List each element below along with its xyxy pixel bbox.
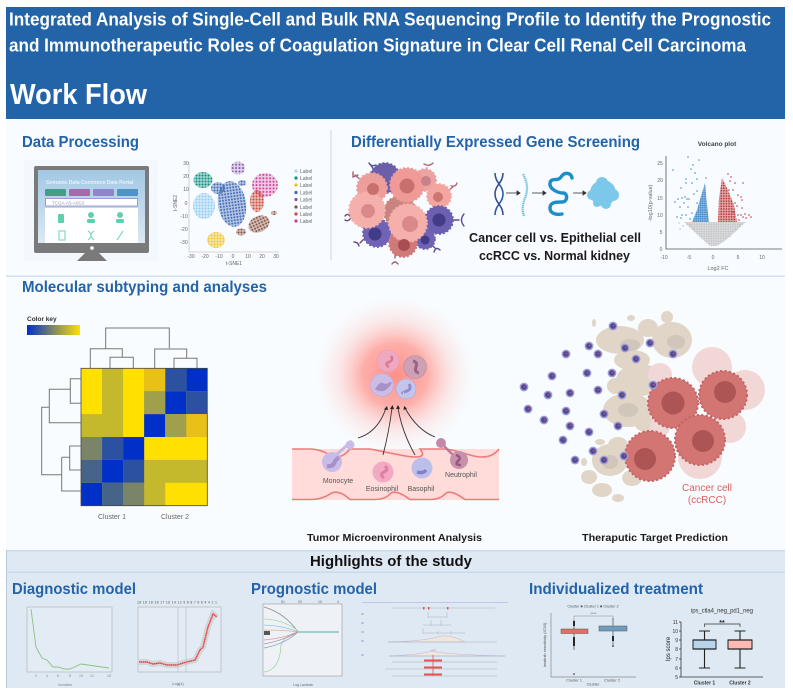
chart: IPS score boxplot: 8 [675,647,678,653]
chart: drug sensitivity boxplot: Cluster [587,682,600,686]
heading: prognostic model: Prognostic model [251,581,377,598]
cancer cell label: (ccRCC) [688,495,726,506]
chart: t-SNE scatter: 20 [259,254,265,260]
chart: LASSO coefficient paths: 51 [281,600,285,604]
cluster labels [98,514,189,521]
heading: molecular subtyping: Molecular subtyping and analyses [22,279,267,296]
legend: cluster labels [294,169,312,225]
chart: misclassification curve [137,600,221,686]
heading: highlights: Highlights of the study [310,553,473,570]
migrated immune cells [370,350,426,399]
chart: volcano plot: 25 [657,161,663,167]
chart: drug sensitivity boxplot: Cluster 1 [566,678,583,682]
heatmap cells [81,368,207,506]
chart: error vs variables: 10 [79,674,83,678]
chart: volcano plot: 10 [759,255,765,261]
chart: IPS score boxplot: Cluster 2 [729,680,751,686]
legend: cluster labels: Label [300,219,312,225]
text: comparison labels: Cancer cell vs. Epithelial cell [469,231,641,245]
cancer cell label [682,483,732,506]
chart: IPS score boxplot: 11 [673,620,678,626]
panel: differentially expressed gene screening [345,134,782,272]
title: Integrated Analysis of Single-Cell and Bulk RNA Sequencing Profile to Identify the Prognostic [9,10,771,30]
panel: data processing [22,134,312,267]
chart: clustered heatmap [27,316,207,521]
caption: tumor microenvironment: Tumor Microenvironment Analysis [307,532,482,544]
chart: drug sensitivity boxplot: Cluster ■ Cluster 1 ■ Cluster 2 [567,604,619,608]
header banner [6,7,785,119]
chart: IPS score boxplot: 10 [672,629,678,635]
heading: individualized treatment: Individualized treatment [529,581,704,598]
chart: volcano plot: -5 [687,255,691,261]
chart: error vs variables: 12 [90,674,94,678]
chart: t-SNE scatter: 10 [183,187,189,193]
chart: drug sensitivity boxplot: Imatinib sensitivity (IC50) [542,622,547,667]
background pink cells [648,347,765,479]
cancer cells [625,371,747,481]
legend: color key [27,316,80,335]
chart: t-SNE scatter: 20 [183,174,189,180]
heading: data processing: Data Processing [22,134,139,151]
legend: cluster labels: Label [300,183,312,189]
chart: volcano plot: 5 [737,255,740,261]
panel: individualized treatment [529,581,763,686]
cluster labels: Cluster 2 [161,514,189,521]
chart: misclassification curve: Log(λ) [172,681,184,686]
caption: therapeutic target: Theraputic Target Prediction [582,532,728,544]
illustration: DNA to protein flow [495,173,619,216]
chart: t-SNE scatter [173,161,312,267]
work flow heading: Work Flow [10,79,147,111]
chart: LASSO coefficient paths: 4 [337,600,339,604]
chart: t-SNE scatter: -30 [187,254,195,260]
migration arrows [358,405,435,455]
legend: cluster labels: Label [300,169,312,175]
chart: drug sensitivity boxplot: **** [590,611,597,616]
chart: t-SNE scatter: -10 [180,214,188,220]
legend: color key: Color key [27,316,57,323]
legend: cluster labels: Label [300,212,312,218]
chart: LASSO coefficient paths: 10 [318,600,322,604]
illustration: tumor cell cluster [345,163,464,264]
panel: prognostic model [251,581,508,687]
legend: cluster labels: Label [300,205,312,211]
icon: DNA helix [495,173,503,215]
text: comparison labels [469,231,641,263]
chart: volcano plot: -log10(p-value) [648,184,654,222]
chart: t-SNE scatter: -30 [180,240,188,246]
heading: gene screening: Differentially Expressed Gene Screening [351,134,640,151]
chart: volcano plot: 20 [657,178,663,184]
chart: IPS score boxplot: 5 [675,675,678,681]
chart: volcano plot: 5 [660,230,663,236]
chart: error vs variables: 4 [46,674,48,678]
chart: volcano plot: 0 [712,255,715,261]
T cells [520,322,677,464]
cell labels: Eosinophil [366,486,399,493]
chart: t-SNE scatter: 30 [273,254,279,260]
chart: drug sensitivity boxplot: Cluster 2 [604,678,621,682]
chart: volcano plot [648,141,782,272]
cluster labels: Cluster 1 [98,514,126,521]
icon: peptide chain [550,173,572,214]
chart: t-SNE scatter: -20 [180,227,188,233]
chart: nomogram [361,602,508,676]
icon: data portal monitor: Genomic Data Commons Data Portal [46,180,134,186]
icon: data portal monitor [24,160,158,261]
title: and Immunotherapeutic Roles of Coagulation Signature in Clear Cell Renal Cell Carcinoma [9,36,747,56]
legend: cluster labels: Label [300,190,312,196]
cell labels: Neutrophil [445,472,477,479]
chart: volcano plot: Volcano plot [698,141,737,148]
chart: t-SNE scatter: -20 [201,254,209,260]
chart: t-SNE scatter: t-SNE1 [226,261,242,267]
cell labels: Basophil [408,486,435,493]
chart: error vs variables: 15 [107,674,111,678]
dying beige cells [581,311,692,502]
chart: t-SNE scatter: 10 [245,254,251,260]
chart: error vs variables [27,607,112,687]
illustration: immune cell recruitment [292,297,499,544]
chart: t-SNE scatter: 0 [232,254,235,260]
icon: data portal monitor: TCGA-A5-A0G2 [52,200,85,206]
chart: IPS score boxplot: Ips score [666,636,672,661]
dendrograms [42,328,197,491]
chart: IPS score boxplot: 7 [675,657,678,663]
inflammation glow [315,297,475,453]
chart: LASSO coefficient paths [263,600,342,687]
icon: mRNA strand [523,174,527,216]
panel: molecular subtyping and analyses [6,277,785,550]
chart: IPS score boxplot [666,608,763,686]
chart: error vs variables: 8 [69,674,71,678]
chart: volcano plot: Log2 FC [707,266,729,272]
chart: error vs variables: Variables [58,683,72,687]
blood vessel [292,449,499,500]
arrows [506,191,586,195]
chart: LASSO coefficient paths: Log Lambda [293,683,313,687]
chart: volcano plot: 0 [660,247,663,253]
chart: LASSO coefficient paths: 20 [298,600,302,604]
cell labels: Monocyte [323,478,353,485]
cancer cell label: Cancer cell [682,483,732,494]
panel: highlights of the study [6,550,785,688]
chart: t-SNE scatter: 0 [185,201,188,207]
chart: IPS score boxplot: ** [719,620,725,627]
chart: IPS score boxplot: 6 [675,666,678,672]
title [9,10,771,56]
text: comparison labels: ccRCC vs. Normal kidney [479,249,630,263]
chart: misclassification curve: 18 18 18 18 17 16 14 12 9 8 8 7 6 6 4 4 1 1 [137,600,217,604]
chart: t-SNE scatter: t-SNE2 [173,195,179,211]
chart: t-SNE scatter: 30 [183,161,189,167]
legend: cluster labels: Label [300,198,312,204]
vessel immune cells [322,438,468,482]
chart: drug sensitivity boxplot [542,604,636,686]
icon: folded protein [587,177,619,209]
chart: t-SNE scatter: -10 [215,254,223,260]
chart: IPS score boxplot: Cluster 1 [694,680,715,686]
chart: error vs variables: 6 [57,674,59,678]
chart: IPS score boxplot: ips_ctla4_neg_pd1_neg [691,608,753,614]
chart: volcano plot: 10 [657,213,663,219]
panel: diagnostic model [12,581,221,687]
illustration: T cells attacking cancer cells [520,311,765,544]
heading: diagnostic model: Diagnostic model [12,581,136,598]
chart: volcano plot: -10 [660,255,668,261]
chart: IPS score boxplot: 9 [675,638,678,644]
chart: volcano plot: 15 [657,196,663,202]
chart: error vs variables: 2 [35,674,37,678]
cell labels [323,472,477,493]
legend: cluster labels: Label [300,176,312,182]
panel: top section background [6,120,785,277]
